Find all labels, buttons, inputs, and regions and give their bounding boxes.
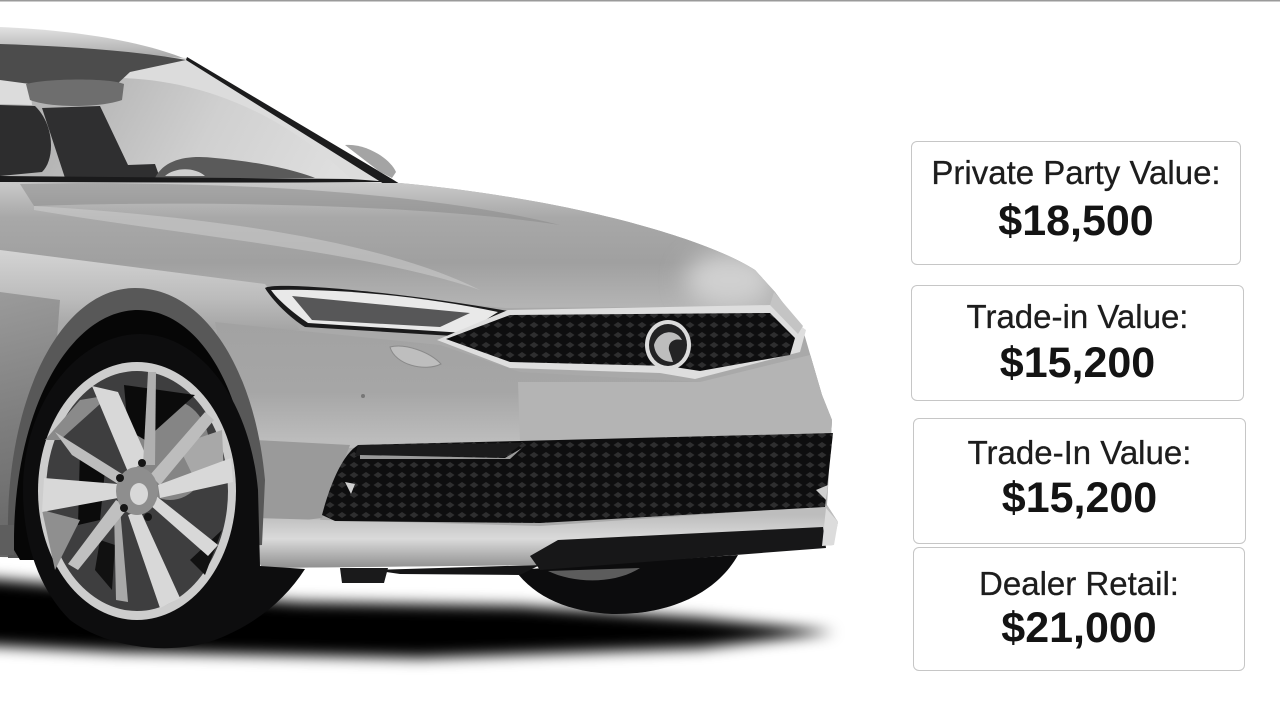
front right tire — [515, 555, 738, 614]
bumper lip — [255, 505, 840, 570]
windshield and cabin — [0, 27, 400, 184]
hub — [116, 467, 158, 515]
fender panel — [0, 250, 285, 312]
front wheel — [23, 334, 305, 648]
bumper light panel — [518, 355, 832, 427]
card: trade-in value second: $15,200 — [1002, 474, 1157, 522]
card: trade-in value — [911, 285, 1244, 401]
lower grille — [322, 433, 833, 523]
ground shadow — [0, 576, 835, 658]
fog lamp cap and sensor — [361, 346, 441, 398]
card: private party value — [911, 141, 1241, 265]
side panels — [45, 395, 110, 440]
top border line — [0, 0, 1280, 2]
bumper corner shading — [260, 440, 350, 520]
headlight — [265, 286, 508, 337]
card: private party value: $18,500 — [998, 197, 1154, 245]
wheel arch — [8, 288, 265, 560]
sill — [0, 525, 14, 555]
card: trade-in value second: Trade-In Value: — [968, 434, 1191, 471]
car body: hood, fender, bumper — [0, 180, 860, 580]
hood streaks — [20, 183, 560, 290]
card: trade-in value: Trade-in Value: — [967, 298, 1188, 335]
hood highlight — [685, 252, 775, 308]
rear panel — [0, 292, 60, 560]
hood — [0, 182, 860, 308]
rim inner — [46, 371, 228, 611]
splitter and underbody — [340, 508, 838, 583]
rim outer — [38, 362, 236, 620]
spokes — [42, 372, 233, 608]
card: trade-in value second — [913, 418, 1246, 544]
card: dealer retail — [913, 547, 1245, 671]
card: private party value: Private Party Value: — [931, 154, 1221, 191]
card: trade-in value: $15,200 — [1000, 339, 1155, 387]
brake disc — [130, 400, 210, 500]
card: dealer retail: Dealer Retail: — [979, 565, 1179, 602]
upper grille — [437, 292, 806, 379]
card: dealer retail: $21,000 — [1001, 604, 1157, 652]
emblem — [645, 320, 691, 370]
caliper — [178, 430, 224, 480]
dark openings — [124, 385, 195, 440]
tire — [23, 334, 305, 648]
bumper upper — [254, 356, 832, 520]
